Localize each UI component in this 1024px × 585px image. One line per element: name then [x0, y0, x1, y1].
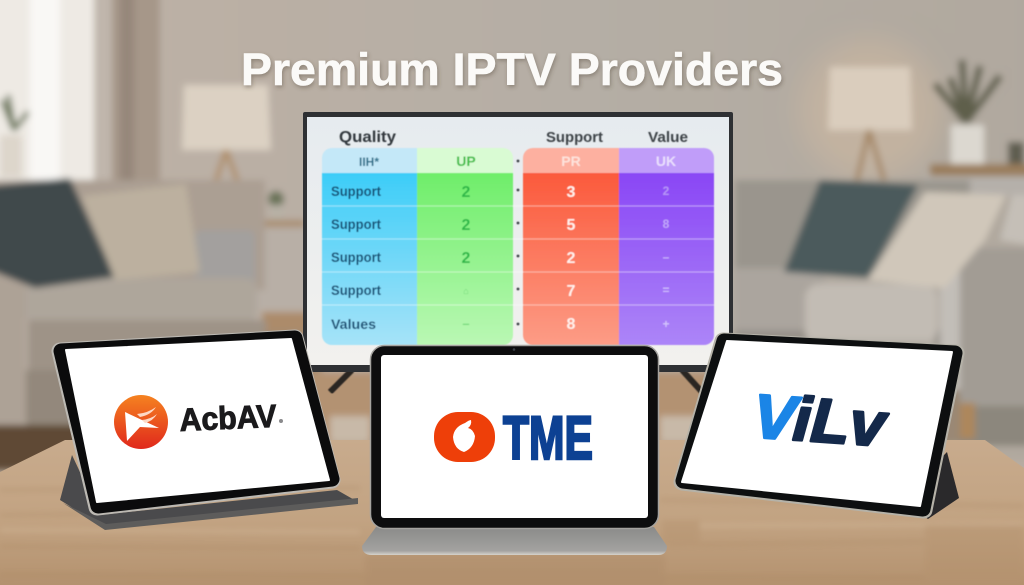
title: Premium IPTV Providers — [241, 44, 783, 95]
heading: value: Value — [648, 129, 688, 146]
column dots — [517, 160, 519, 325]
tablet stand — [60, 455, 358, 528]
column: purple: 8 — [663, 217, 670, 231]
logo: red blob — [434, 412, 495, 462]
tablet screen — [381, 355, 648, 518]
column: purple: + — [662, 317, 670, 331]
tablet screen — [682, 341, 952, 506]
tablet screen — [66, 339, 329, 502]
column: green: ⌂ — [463, 286, 469, 296]
tablet edge — [682, 341, 956, 510]
column: blue: Support — [331, 216, 381, 232]
right dark pillow — [784, 180, 918, 278]
column: green: 2 — [462, 217, 471, 234]
left lamp — [182, 85, 271, 150]
center tablet — [362, 346, 667, 555]
tablet body — [61, 338, 332, 506]
column: red — [523, 148, 619, 345]
column: green: – — [462, 316, 470, 331]
column: blue: Values — [331, 316, 376, 332]
television — [303, 112, 733, 392]
right sofa — [735, 180, 970, 272]
column: blue: IIH* — [359, 155, 379, 169]
column: purple — [619, 148, 714, 345]
tablet body — [370, 346, 658, 528]
right floor — [960, 406, 1024, 446]
tablet base — [362, 527, 667, 555]
column: red: 5 — [567, 217, 576, 234]
column: purple: 2 — [663, 184, 670, 198]
column: purple: – — [663, 250, 670, 264]
column: purple: = — [662, 283, 670, 297]
right plant — [935, 60, 1000, 122]
left dark pillow — [0, 178, 115, 288]
left tablet — [60, 338, 358, 530]
window light — [0, 0, 94, 185]
column: red: 2 — [567, 250, 576, 267]
left floor shadow — [0, 425, 100, 470]
side table — [190, 220, 305, 227]
right lamp glow — [800, 40, 940, 180]
logo: orange circle — [114, 395, 168, 449]
logo text: TME — [503, 404, 593, 472]
tv bezel — [303, 112, 733, 372]
column: green: UP — [456, 153, 476, 169]
column: blue: Support — [331, 282, 381, 298]
right cream pillow — [868, 192, 1006, 288]
tablet edge — [60, 338, 332, 507]
column: blue: Support — [331, 249, 381, 265]
wooden table — [0, 440, 1024, 585]
right tablet — [682, 341, 959, 519]
tv screen — [307, 117, 729, 365]
column: red: 8 — [567, 316, 576, 333]
curtain — [94, 0, 160, 190]
tv stand feet — [330, 370, 702, 392]
left beige pillow — [82, 184, 200, 280]
column: blue: Support — [331, 183, 381, 199]
column: red: 7 — [567, 283, 576, 300]
logo text: AcbAV — [179, 398, 278, 438]
column: red: 3 — [567, 184, 576, 201]
tablet stand — [900, 452, 959, 519]
heading: quality: Quality — [339, 129, 396, 146]
heading: support: Support — [546, 129, 603, 146]
column: red: PR — [561, 153, 581, 169]
column: green: 2 — [462, 184, 471, 201]
left plant — [2, 95, 28, 130]
right lamp — [828, 67, 912, 130]
tablet body — [683, 341, 955, 509]
comparison table — [322, 129, 714, 345]
left sofa — [0, 180, 265, 290]
right shelf — [930, 164, 1024, 176]
column: purple: UK — [656, 153, 676, 169]
column: green — [417, 148, 513, 345]
column: green: 2 — [462, 250, 471, 267]
console under tv — [262, 332, 322, 444]
logo text: ViLv — [751, 382, 891, 460]
column: blue — [322, 148, 417, 345]
